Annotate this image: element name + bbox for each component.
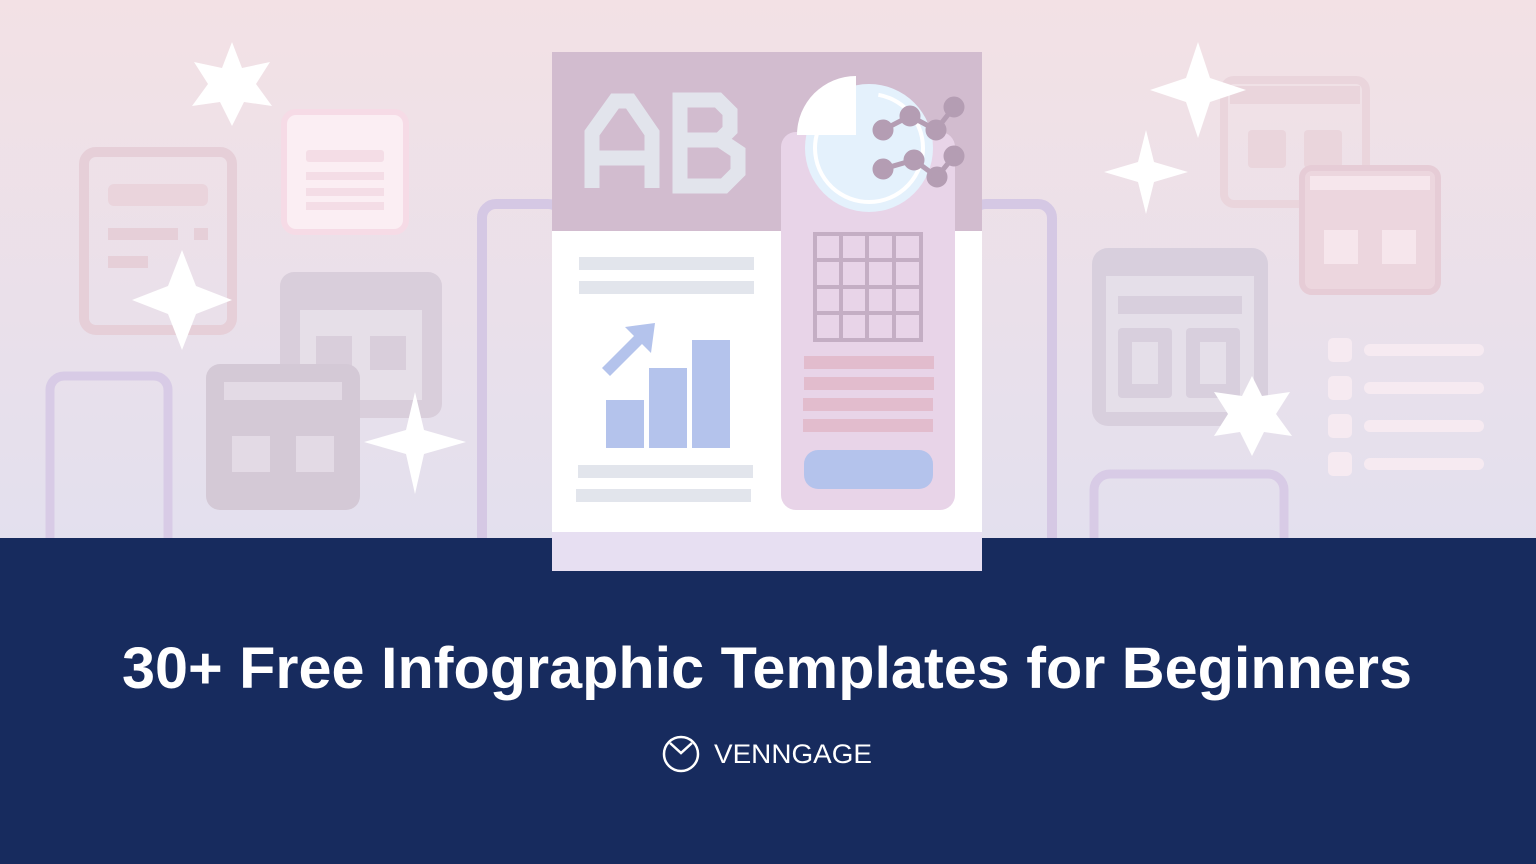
left decorative illustrations: [50, 112, 562, 564]
pie chart: [797, 76, 933, 212]
sparkles left: [132, 42, 466, 494]
logo: venngage: VENNGAGE: [714, 739, 872, 769]
bar chart with arrow: [602, 323, 730, 448]
sparkles right: [1104, 42, 1292, 456]
title: 30+ Free Infographic Templates for Beginners: [122, 636, 1412, 701]
central template card: [552, 52, 982, 571]
right decorative illustrations: [972, 80, 1484, 564]
logo: venngage: [664, 737, 872, 771]
line charts: [875, 99, 962, 185]
table grid: [815, 234, 921, 340]
text lines: [576, 257, 754, 502]
navy footer band: [0, 538, 1536, 864]
AB letters: [592, 100, 738, 188]
right pink panel: [781, 132, 955, 510]
